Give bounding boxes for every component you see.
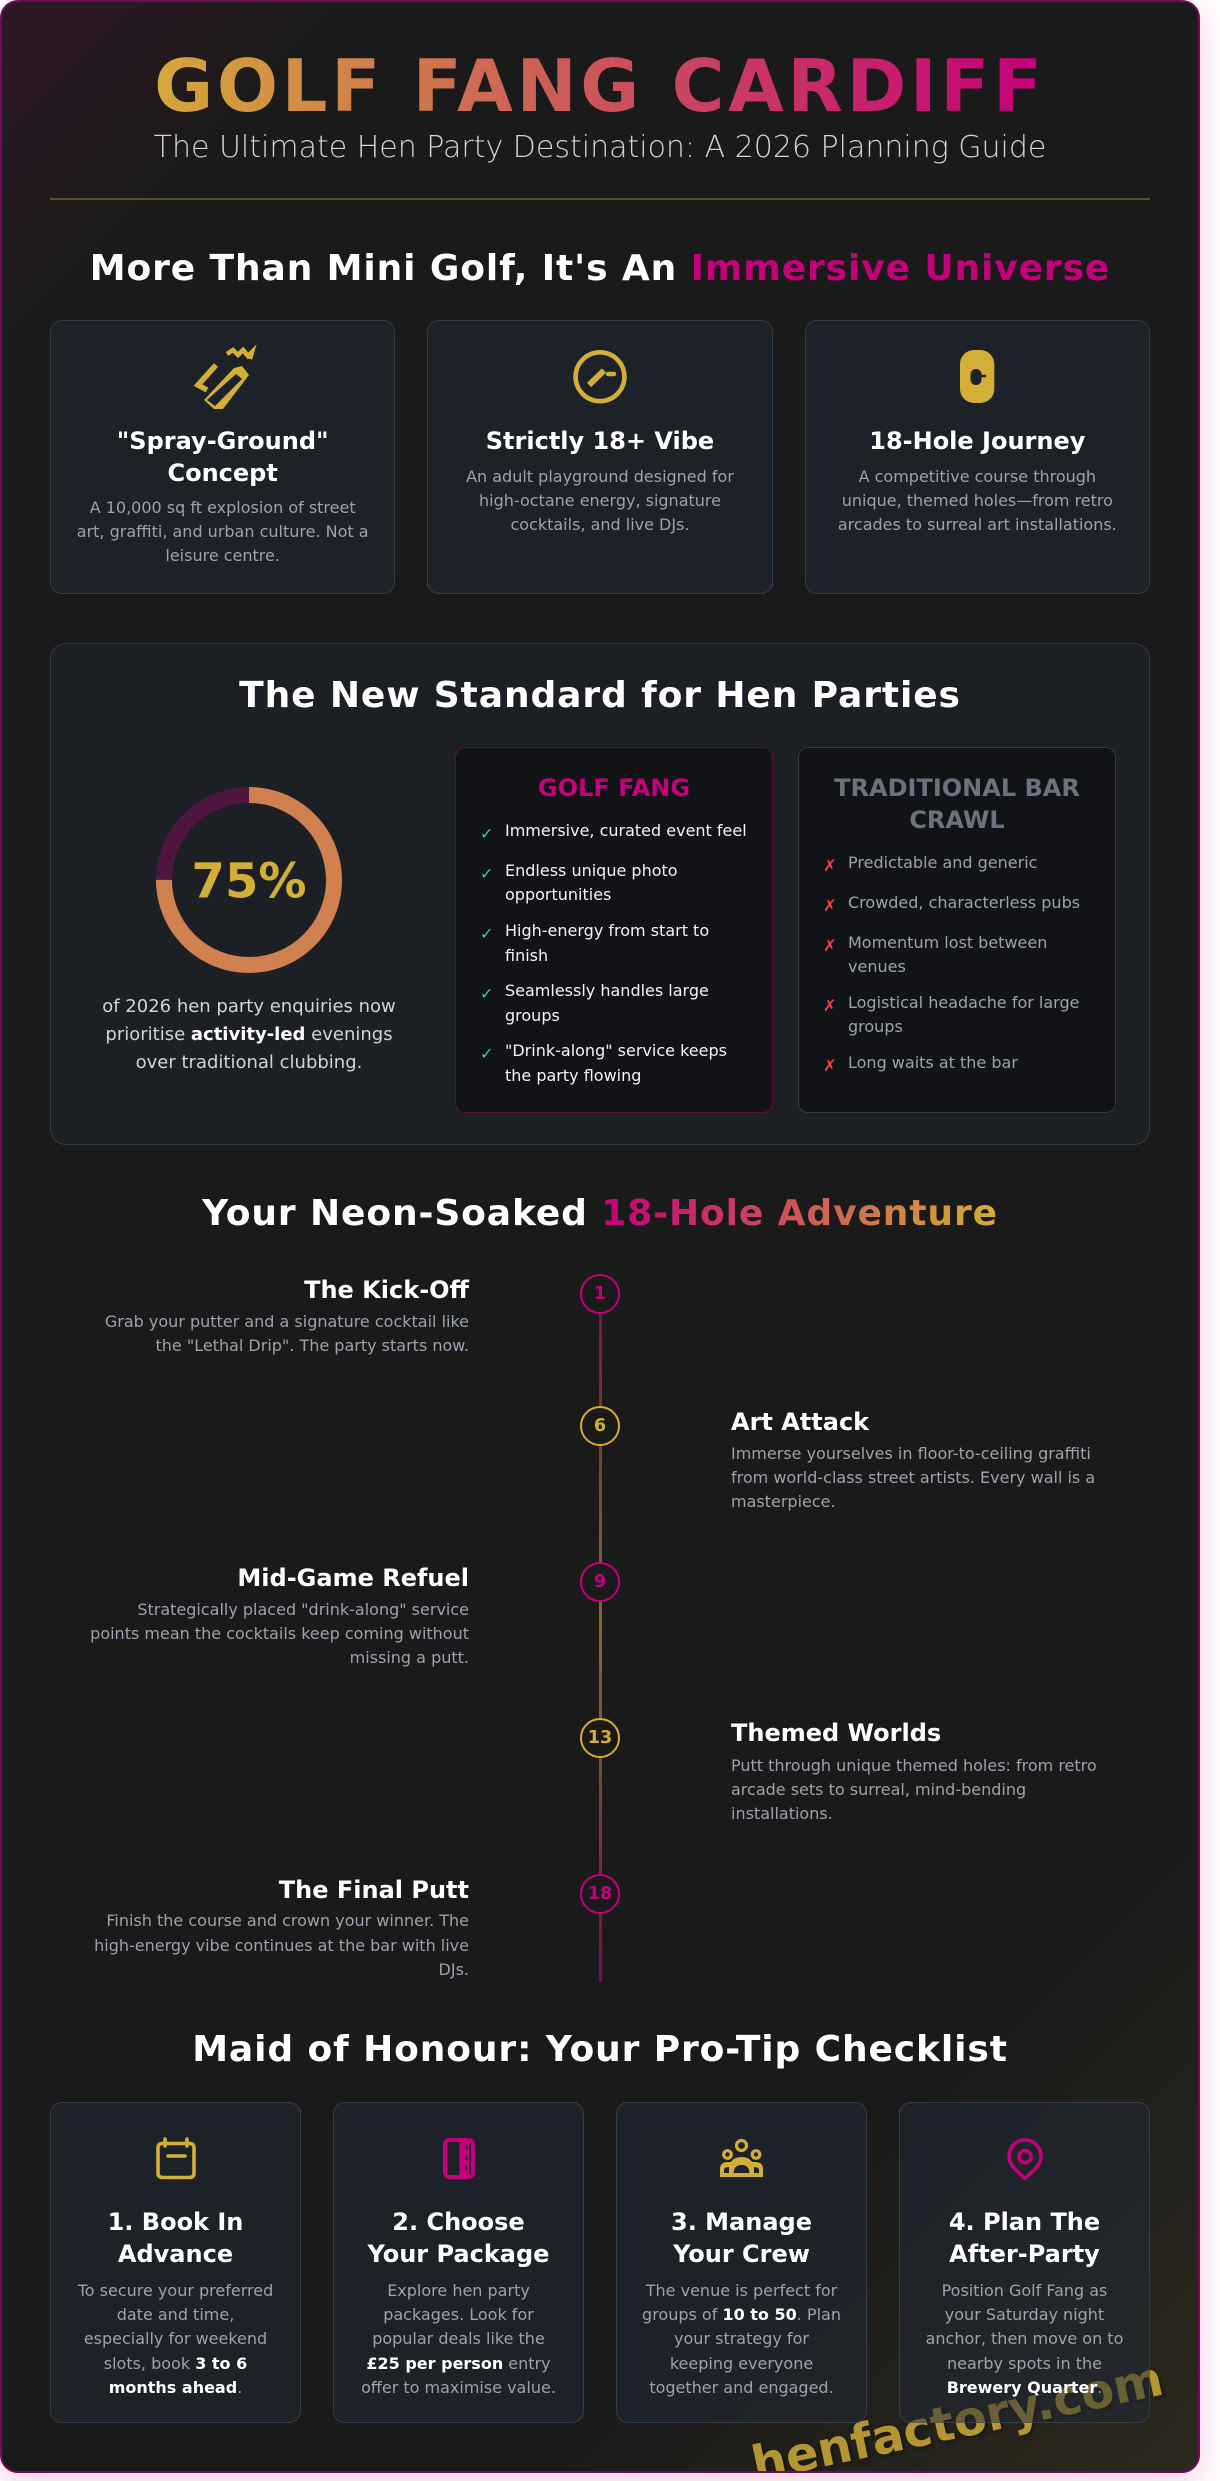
icon: gauge circle xyxy=(573,350,627,404)
stop 18 marker: 18 xyxy=(588,1884,612,1904)
icon: calendar xyxy=(156,2137,196,2180)
stop 1 marker: 1 xyxy=(594,1284,606,1304)
list item: Momentum lost between xyxy=(848,933,1047,952)
card title xyxy=(899,2206,1150,2270)
card text: A competitive course through xyxy=(859,467,1096,486)
stop 18 text: high-energy vibe continues at the bar with live xyxy=(94,1936,469,1955)
card title: 3. Manage xyxy=(671,2208,812,2236)
card text: your Saturday night xyxy=(945,2305,1104,2324)
column: golf fang: ✓ xyxy=(480,864,493,883)
card text: unique, themed holes—from retro xyxy=(842,491,1113,510)
column heading: CRAWL xyxy=(909,806,1005,834)
panel: new standard comparison xyxy=(50,643,1150,1145)
card: book in advance xyxy=(50,2102,301,2423)
list item: Long waits at the bar xyxy=(848,1053,1018,1072)
stop 6 text: Immerse yourselves in floor-to-ceiling graffiti xyxy=(731,1444,1091,1463)
card text xyxy=(361,2281,556,2397)
stop 6 text xyxy=(731,1444,1095,1511)
heading: pro-tip checklist: Maid of Honour: Your Pro-Tip Checklist xyxy=(192,2029,1008,2070)
card title: Strictly 18+ Vibe xyxy=(486,427,714,455)
stop 9 text xyxy=(90,1600,469,1667)
stop 6 text: masterpiece. xyxy=(731,1492,836,1511)
card text: keeping everyone xyxy=(670,2354,813,2373)
icon: spray can xyxy=(194,344,256,409)
card text: nearby spots in the xyxy=(947,2354,1102,2373)
icon: golf hole pill xyxy=(960,350,994,403)
card text: The venue is perfect for xyxy=(646,2281,837,2300)
card text: especially for weekend xyxy=(84,2329,267,2348)
card text: £25 per person entry xyxy=(366,2354,551,2373)
card text xyxy=(78,2281,273,2397)
list item: Seamlessly handles large xyxy=(505,981,709,1000)
stop 1 marker xyxy=(580,1274,620,1314)
card: choose your package xyxy=(333,2102,584,2423)
icon: ticket xyxy=(443,2138,475,2179)
stop 6 title: Art Attack xyxy=(731,1408,869,1436)
stop 13 marker xyxy=(580,1718,620,1758)
column: traditional bar crawl: ✗ xyxy=(823,896,836,915)
card title: After-Party xyxy=(949,2240,1100,2268)
card text: leisure centre. xyxy=(165,546,280,565)
card: manage your crew xyxy=(616,2102,867,2423)
card title: 2. Choose xyxy=(392,2208,525,2236)
card text xyxy=(899,2279,1150,2400)
card text: offer to maximise value. xyxy=(361,2378,556,2397)
donut caption xyxy=(102,996,396,1073)
stop 13 text xyxy=(731,1756,1097,1823)
card title: 4. Plan The xyxy=(949,2208,1100,2236)
card text: together and engaged. xyxy=(649,2378,834,2397)
card text: popular deals like the xyxy=(372,2329,545,2348)
stop 6 text: from world-class street artists. Every wall is a xyxy=(731,1468,1095,1487)
heading: 18-hole adventure: Your Neon-Soaked 18-Hole Adventure xyxy=(202,1192,998,1234)
stop 1 text: Grab your putter and a signature cocktail like xyxy=(105,1312,469,1331)
card text: high-octane energy, signature xyxy=(479,491,721,510)
column: traditional bar crawl: ✗ xyxy=(823,856,836,875)
timeline xyxy=(90,1274,1097,1982)
card text: art, graffiti, and urban culture. Not a xyxy=(77,522,369,541)
stop 13 text: installations. xyxy=(731,1804,833,1823)
column heading: TRADITIONAL BAR xyxy=(834,774,1080,802)
donut caption: over traditional clubbing. xyxy=(136,1052,362,1073)
stop 9 marker xyxy=(580,1562,620,1602)
list item xyxy=(480,921,709,964)
list item: Predictable and generic xyxy=(848,853,1037,872)
stop 13 text: Putt through unique themed holes: from retro xyxy=(731,1756,1097,1775)
card title xyxy=(117,427,329,487)
card title: Your Package xyxy=(368,2240,549,2268)
heading: immersive universe: More Than Mini Golf, It's An Immersive Universe xyxy=(90,248,1110,288)
card text: A 10,000 sq ft explosion of street xyxy=(90,498,356,517)
card title: Advance xyxy=(118,2240,233,2268)
card title xyxy=(367,2208,549,2268)
list item: "Drink-along" service keeps xyxy=(505,1041,727,1060)
icon: map pin xyxy=(1003,2136,1047,2182)
card text: cocktails, and live DJs. xyxy=(510,515,690,534)
panel: checklist cards xyxy=(50,2102,1150,2423)
column: golf fang: ✓ xyxy=(480,1044,493,1063)
card title: 1. Book In xyxy=(108,2208,243,2236)
panel: feature cards xyxy=(50,320,1150,594)
card text: Position Golf Fang as xyxy=(942,2281,1107,2300)
list item: opportunities xyxy=(505,885,611,904)
card text: groups of 10 to 50. Plan xyxy=(642,2305,841,2324)
card title: 18-Hole Journey xyxy=(869,427,1085,455)
panel heading: The New Standard for Hen Parties xyxy=(239,674,961,716)
donut caption: prioritise activity-led evenings xyxy=(105,1024,393,1045)
card title: Your Crew xyxy=(673,2240,810,2268)
card text: To secure your preferred xyxy=(78,2281,273,2300)
card text: date and time, xyxy=(117,2305,234,2324)
stop 13 marker: 13 xyxy=(588,1728,612,1748)
list item: groups xyxy=(848,1017,903,1036)
card text: arcades to surreal art installations. xyxy=(838,515,1117,534)
stop 18 text: Finish the course and crown your winner. The xyxy=(106,1911,469,1930)
column: traditional bar crawl: ✗ xyxy=(823,996,836,1015)
card text: Explore hen party xyxy=(387,2281,530,2300)
subtitle: The Ultimate Hen Party Destination: A 2026 Planning Guide xyxy=(154,130,1046,165)
stop 13 title: Themed Worlds xyxy=(731,1719,941,1747)
list item xyxy=(823,933,1047,976)
donut chart: 75%: 75% xyxy=(192,853,306,909)
card text: your strategy for xyxy=(674,2329,809,2348)
donut caption: of 2026 hen party enquiries now xyxy=(102,996,396,1016)
column: golf fang: ✓ xyxy=(480,924,493,943)
stop 18 text xyxy=(94,1911,469,1979)
stop 1 title: The Kick-Off xyxy=(304,1276,469,1304)
card text: anchor, then move on to xyxy=(926,2329,1123,2348)
list item xyxy=(480,861,678,904)
card text xyxy=(838,467,1117,534)
list item xyxy=(480,1041,727,1085)
column heading: GOLF FANG xyxy=(538,774,690,802)
column: golf fang: ✓ xyxy=(480,824,493,843)
stop 9 text: missing a putt. xyxy=(350,1648,469,1667)
column: traditional bar crawl: ✗ xyxy=(823,936,836,955)
card: strictly 18+ vibe xyxy=(427,320,773,594)
list item: venues xyxy=(848,957,906,976)
column: traditional bar crawl xyxy=(798,747,1116,1113)
stop 6 marker xyxy=(580,1406,620,1446)
card text: An adult playground designed for xyxy=(466,467,734,486)
card: plan the after-party xyxy=(899,2102,1150,2423)
stop 9 text: Strategically placed "drink-along" service xyxy=(137,1600,469,1619)
stop 1 text xyxy=(105,1312,469,1355)
card text xyxy=(466,467,734,534)
stop 18 text: DJs. xyxy=(439,1960,469,1979)
donut chart: 75% xyxy=(156,787,342,973)
card text: months ahead. xyxy=(109,2378,242,2397)
card text xyxy=(77,498,369,565)
stop 18 marker xyxy=(580,1874,620,1914)
stop 13 text: arcade sets to surreal, mind-bending xyxy=(731,1780,1026,1799)
card text: packages. Look for xyxy=(383,2305,534,2324)
list item: groups xyxy=(505,1006,560,1025)
card: spray-ground concept xyxy=(50,320,395,594)
stop 1 text: the "Lethal Drip". The party starts now. xyxy=(156,1336,469,1355)
column: golf fang xyxy=(455,747,773,1113)
card title: Concept xyxy=(167,459,278,487)
stop 9 title: Mid-Game Refuel xyxy=(237,1564,469,1592)
list item: Crowded, characterless pubs xyxy=(848,893,1080,912)
list item: High-energy from start to xyxy=(505,921,709,940)
list item xyxy=(480,981,709,1025)
stop 9 marker: 9 xyxy=(594,1572,606,1592)
card title: "Spray-Ground" xyxy=(117,427,329,455)
icon: group of people xyxy=(720,2138,763,2177)
column: golf fang: ✓ xyxy=(480,984,493,1003)
list item: Immersive, curated event feel xyxy=(505,821,747,840)
stop 6 marker: 6 xyxy=(594,1416,606,1436)
card text: Brewery Quarter. xyxy=(947,2378,1102,2397)
card: 18-hole journey xyxy=(805,320,1150,594)
card title xyxy=(108,2208,243,2268)
column: traditional bar crawl: ✗ xyxy=(823,1056,836,1075)
list item: the party flowing xyxy=(505,1066,641,1085)
list item xyxy=(823,993,1079,1036)
card text: slots, book 3 to 6 xyxy=(104,2354,247,2373)
list item: Endless unique photo xyxy=(505,861,678,880)
title: GOLF FANG CARDIFF xyxy=(154,44,1046,128)
card title xyxy=(671,2208,812,2268)
list item: finish xyxy=(505,946,548,964)
stop 9 text: points mean the cocktails keep coming without xyxy=(90,1624,469,1643)
card text xyxy=(642,2281,841,2397)
column heading xyxy=(834,774,1080,834)
stop 18 title: The Final Putt xyxy=(279,1876,469,1904)
list item: Logistical headache for large xyxy=(848,993,1079,1012)
